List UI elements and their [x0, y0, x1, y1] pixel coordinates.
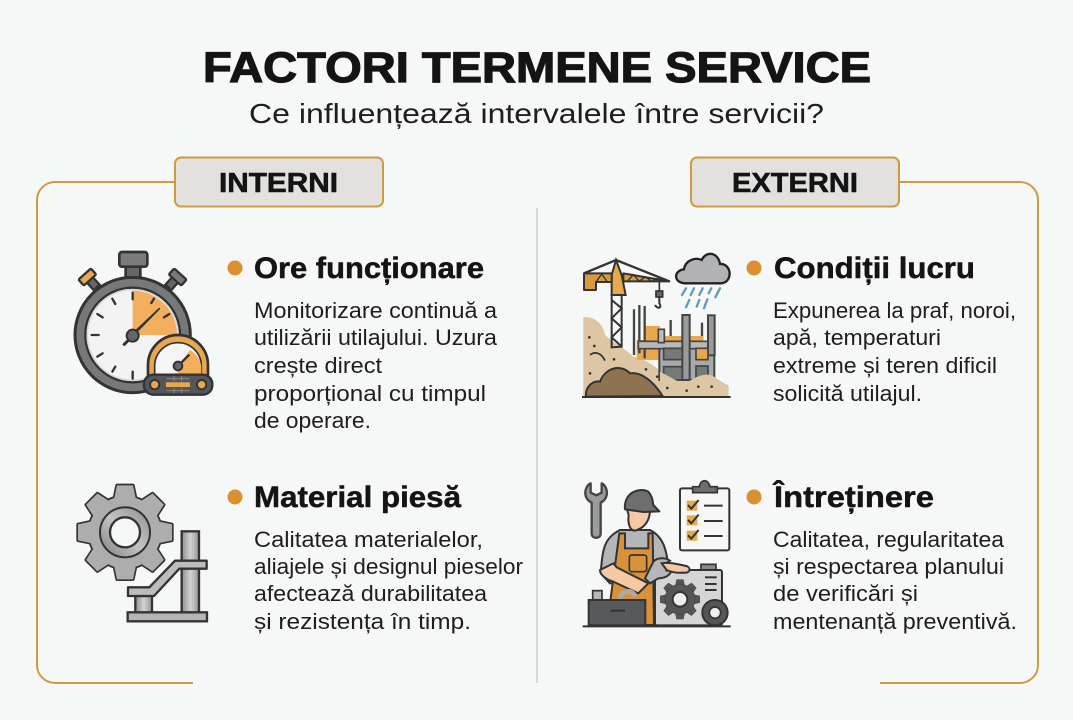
text: material piesa: afectează durabilitatea	[254, 581, 488, 606]
heading: externi: EXTERNI	[732, 167, 858, 198]
panel: externi frame	[880, 182, 1038, 683]
text: intretinere: mentenanță preventivă.	[773, 609, 1017, 634]
text: material piesa: aliajele și designul pieselor	[254, 554, 523, 579]
text: material piesa	[254, 527, 523, 634]
text: material piesa: și rezistența în timp.	[254, 609, 471, 634]
title: FACTORI TERMENE SERVICE	[203, 44, 871, 92]
text: conditii lucru: extreme și teren dificil	[773, 353, 997, 378]
text: ore functionare: de operare.	[254, 408, 371, 433]
heading: ore functionare: Ore funcționare	[254, 252, 484, 285]
text: ore functionare: proporțional cu timpul	[254, 381, 486, 406]
heading: interni	[175, 158, 383, 206]
heading: conditii lucru: Condiții lucru	[774, 252, 975, 285]
text: ore functionare	[254, 298, 498, 433]
text: ore functionare: crește direct	[254, 353, 382, 378]
panel: interni frame	[37, 182, 193, 683]
text: intretinere: de verificări și	[773, 581, 918, 606]
text: ore functionare: Monitorizare continuă a	[254, 298, 498, 323]
subtitle: Ce influențează intervalele între servicii?	[249, 98, 824, 129]
text: intretinere: și respectarea planului	[773, 554, 1004, 579]
heading: material piesa: Material piesă	[254, 481, 461, 514]
text: conditii lucru: Expunerea la praf, noroi,	[773, 298, 1016, 323]
text: conditii lucru	[773, 298, 1016, 406]
icon: stopwatch with gauge	[75, 252, 212, 395]
heading: externi	[691, 158, 899, 206]
icon: gear and metal part	[78, 485, 207, 621]
heading: intretinere: Întreținere	[772, 480, 934, 514]
text: ore functionare: utilizării utilajului. Uzura	[254, 325, 498, 350]
icon: mechanic with wrench, checklist and engine	[583, 481, 731, 626]
icon: construction site with crane and rain	[582, 254, 731, 397]
text: intretinere	[773, 527, 1017, 634]
text: material piesa: Calitatea materialelor,	[254, 527, 483, 552]
heading: interni: INTERNI	[219, 167, 338, 198]
text: intretinere: Calitatea, regularitatea	[773, 527, 1005, 552]
text: conditii lucru: solicită utilajul.	[773, 381, 922, 406]
text: conditii lucru: apă, temperaturi	[773, 325, 941, 350]
